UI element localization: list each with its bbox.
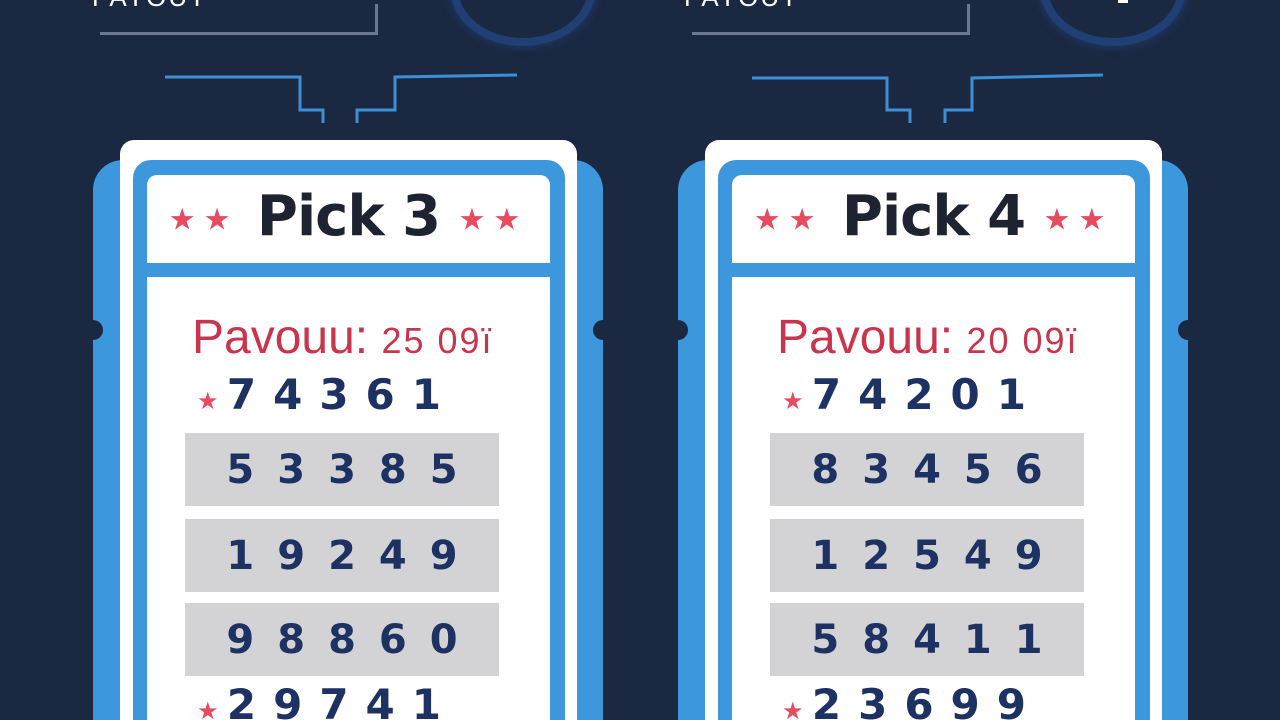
rows: [770, 433, 1084, 506]
panel: Pick 4 ticket: [678, 140, 1188, 720]
connector lines: [165, 74, 1103, 123]
icon: circle left: [450, 0, 596, 46]
rows: 83456: [811, 447, 1066, 493]
payout text: Pavouu: 25 09ї: [192, 311, 494, 364]
payout text: Pavouu: 20 09ї: [777, 311, 1079, 364]
panel: Pick 3 ticket: 98860: [226, 617, 481, 663]
number 74361: ★ 74361: [197, 370, 458, 419]
top frame line left: [100, 4, 378, 35]
panel: Pick 4 ticket: 58411: [811, 617, 1066, 663]
heading: ★★ Pick 3 ★★: [169, 184, 528, 249]
panel: Pick 3 ticket: 19249: [226, 533, 481, 579]
rows: [185, 433, 499, 506]
number 74201: ★ 74201: [782, 370, 1043, 419]
rows: 53385: [226, 447, 481, 493]
panel: Pick 3 ticket: [93, 140, 603, 720]
icon: circle right: [1040, 0, 1186, 46]
heading: ★★ Pick 4 ★★: [754, 184, 1113, 249]
panel: Pick 4 ticket: 12549: [811, 533, 1066, 579]
top frame line right: [692, 4, 970, 35]
